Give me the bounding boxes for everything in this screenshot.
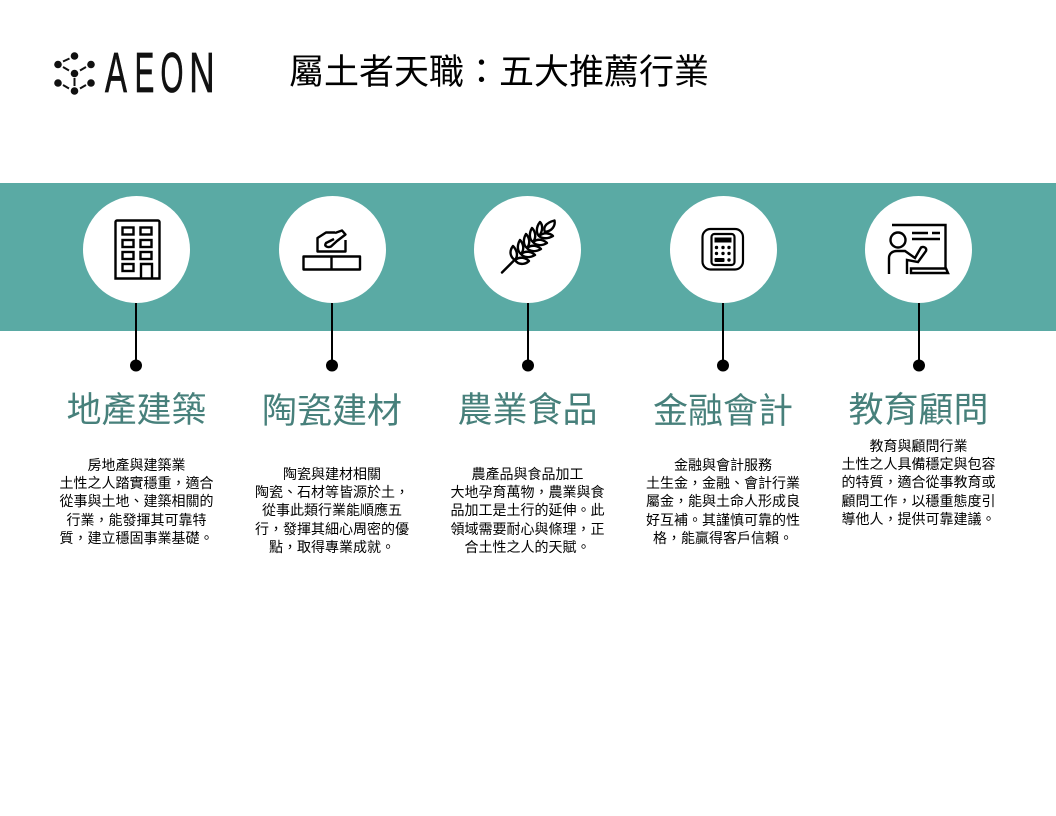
heading: 地產建築: 地產建築	[66, 391, 206, 430]
heading: 陶瓷建材: 陶瓷建材	[262, 392, 402, 431]
text: 教育顧問: 的特質，適合從事教育或	[842, 474, 996, 490]
text: 陶瓷建材	[255, 466, 409, 555]
text: 金融會計: 格，能贏得客戶信賴。	[653, 530, 793, 546]
text: 金融會計: 屬金，能與土命人形成良	[646, 493, 800, 509]
text: 教育顧問: 土性之人具備穩定與包容	[842, 456, 996, 472]
text: 教育顧問	[842, 438, 996, 527]
text: 地產建築	[60, 457, 214, 546]
logo: AEON	[54, 40, 215, 105]
logo: AEON: A	[105, 41, 127, 104]
text: 金融會計: 土生金，金融、會計行業	[646, 475, 800, 491]
text: 陶瓷建材: 行，發揮其細心周密的優	[255, 521, 409, 537]
text: 農業食品: 農產品與食品加工	[472, 466, 584, 482]
text: 地產建築: 房地產與建築業	[88, 457, 186, 473]
icon: teacher at board	[889, 225, 948, 274]
text: 地產建築: 質，建立穩固事業基礎。	[60, 530, 214, 546]
band	[0, 183, 1056, 331]
column 4 marker	[670, 196, 777, 372]
icon: building	[116, 220, 160, 278]
text: 金融會計: 好互補。其謹慎可靠的性	[646, 512, 800, 528]
icon: brick and trowel	[304, 230, 360, 270]
text: 農業食品: 合土性之人的天賦。	[464, 539, 590, 555]
title: 屬土者天職：五大推薦行業	[289, 53, 709, 92]
text: 教育顧問: 教育與顧問行業	[870, 438, 968, 454]
text: 教育顧問: 顧問工作，以穩重態度引	[842, 493, 996, 509]
text: 農業食品	[450, 466, 604, 555]
text: 陶瓷建材: 點，取得專業成就。	[269, 539, 395, 555]
heading: 教育顧問: 教育顧問	[848, 391, 988, 430]
text: 農業食品: 領域需要耐心與條理，正	[450, 521, 604, 537]
text: 陶瓷建材: 從事此類行業能順應五	[262, 502, 402, 518]
logo: AEON: N	[189, 40, 215, 104]
heading: 農業食品: 農業食品	[457, 391, 598, 430]
text: 地產建築: 從事與土地、建築相關的	[60, 493, 214, 509]
text: 金融會計: 金融與會計服務	[674, 457, 772, 473]
text: 教育顧問: 導他人，提供可靠建議。	[842, 511, 996, 527]
column 3 marker	[474, 196, 581, 372]
logo: AEON: E	[135, 41, 154, 105]
icon: calculator	[702, 229, 743, 270]
text: 農業食品: 品加工是土行的延伸。此	[450, 502, 604, 518]
logo: AEON: O	[160, 41, 183, 105]
column 5 marker	[865, 196, 972, 372]
column 1 marker	[83, 196, 190, 372]
text: 金融會計	[646, 457, 800, 546]
icon: wheat	[502, 220, 555, 272]
text: 陶瓷建材: 陶瓷、石材等皆源於土，	[255, 484, 409, 500]
text: 地產建築: 土性之人踏實穩重，適合	[60, 475, 214, 491]
heading: 金融會計: 金融會計	[653, 392, 793, 431]
column 2 marker	[279, 196, 386, 372]
text: 陶瓷建材: 陶瓷與建材相關	[283, 466, 381, 482]
text: 農業食品: 大地孕育萬物，農業與食	[450, 484, 604, 500]
text: 地產建築: 行業，能發揮其可靠特	[66, 512, 206, 528]
